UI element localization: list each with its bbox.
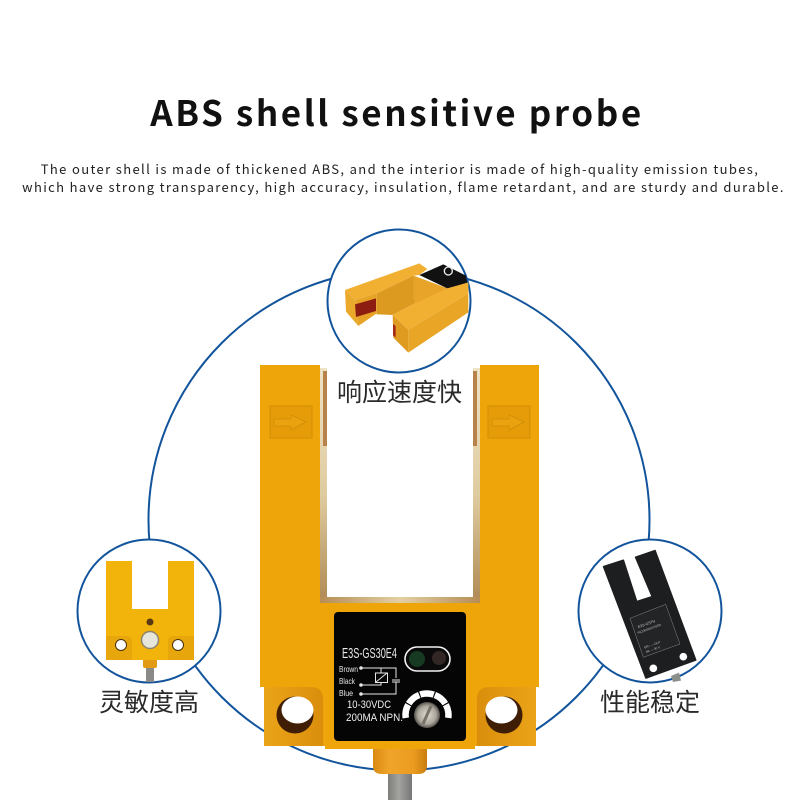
inner channel bevels [320,368,480,603]
callout: stable performance [578,540,722,719]
indicator window [405,647,450,671]
subtitle text block: which have strong transparency, high accuracy, insulation, flame retardant, and are sturdy and durable. [22,177,785,196]
label [419,264,467,288]
label: stable performance: 性能稳定 [600,683,700,719]
left arrow emboss [270,406,312,438]
black sensor icon: BR+ — OUT [644,640,661,650]
sensor cable [388,770,412,800]
wire labels: Black [339,676,356,686]
voltage rating: 10-30VDC [347,699,391,711]
left mounting hole [276,696,314,734]
large blue ring [148,270,650,770]
wire labels [339,664,358,698]
left arm top [345,263,427,300]
yellow sensor icon [106,561,194,682]
flange recess shading [264,687,536,746]
left arm side [345,290,358,326]
wire labels: Brown [339,664,358,674]
callout: high sensitivity [78,540,220,719]
small window [393,324,396,337]
right arm end [393,315,408,353]
subtitle text block: The outer shell is made of thickened ABS, and the interior is made of high-quality emission tubes, [41,159,759,178]
sensor U-shaped body [260,365,539,749]
black label plate [334,612,466,741]
black sensor icon: BK — 30 V [645,645,661,654]
right arm side [408,293,468,353]
sensor collar [373,748,427,774]
wiring schematic [360,667,400,695]
black sensor icon: E3S-GS7N [637,619,656,629]
back wall [413,276,447,306]
right arrow emboss [488,406,530,438]
top ring [328,230,470,372]
callout: fast response [328,230,470,409]
black sensor icon [604,551,696,682]
red window [355,298,376,317]
left arm end [355,293,377,326]
label: high sensitivity: 灵敏度高 [99,683,199,719]
right mounting hole [486,696,522,734]
model number: E3S-GS30E4 [342,645,397,662]
black sensor icon: PKZ300RD37SRD [637,622,662,635]
label: fast response: 响应速度快 [337,373,462,409]
right ring [578,540,722,682]
inner wall [377,276,447,315]
current rating: 200MA NPN. [346,712,403,724]
wire labels: Blue [339,688,353,698]
title: ABS shell sensitive probe [150,86,644,137]
main sensor [260,365,539,800]
left ring [78,540,220,682]
subtitle text block [22,159,785,196]
sensitivity dial [403,691,451,739]
right arm top [393,282,468,330]
isometric sensor icon [345,263,468,353]
